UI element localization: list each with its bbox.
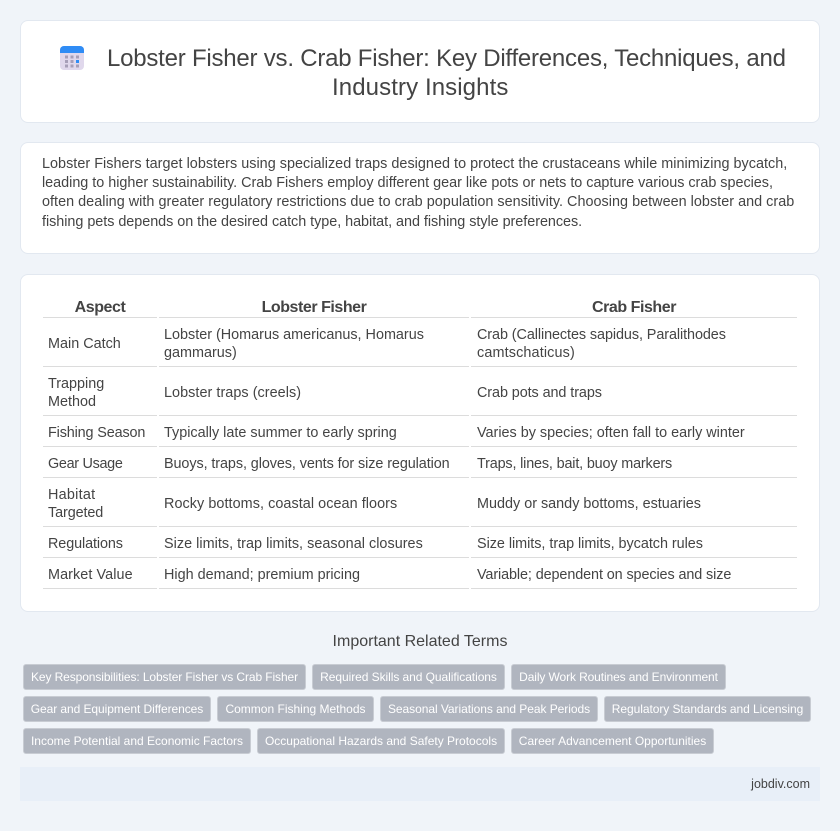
related terms tags: Daily Work Routines and Environment (519, 670, 718, 684)
panel: introduction (20, 142, 820, 254)
footer (20, 767, 820, 801)
text block: introduction: leading to higher sustainability. Crab Fishers employ different gear like pots or nets to capture various crab species, (42, 175, 773, 191)
row: fishing season: Varies by species; often fall to early winter (477, 425, 745, 441)
row: fishing season: Fishing Season (48, 425, 145, 441)
icon: calendar (60, 46, 84, 70)
title: Lobster Fisher vs. Crab Fisher: Key Differences, Techniques, and (107, 44, 786, 72)
panel: header (20, 20, 820, 123)
row: habitat targeted: Targeted (48, 505, 103, 521)
row: habitat targeted (48, 487, 701, 521)
row: habitat targeted: Rocky bottoms, coastal ocean floors (164, 496, 397, 512)
row: regulations: Size limits, trap limits, bycatch rules (477, 536, 703, 552)
row: market value: Market Value (48, 567, 133, 583)
row: main catch: Main Catch (48, 336, 121, 352)
row: fishing season: Typically late summer to early spring (164, 425, 397, 441)
row: habitat targeted: Muddy or sandy bottoms, estuaries (477, 496, 701, 512)
related terms tags: Required Skills and Qualifications (320, 670, 497, 684)
text block: introduction: Lobster Fishers target lobsters using specialized traps designed to protect the crustaceans while minimizing bycatch, (42, 156, 787, 172)
related terms tags (23, 664, 811, 754)
related terms tags: Income Potential and Economic Factors (31, 734, 243, 748)
related terms tags: Seasonal Variations and Peak Periods (388, 702, 590, 716)
row: main catch: gammarus) (164, 345, 237, 361)
row: market value: Variable; dependent on species and size (477, 567, 731, 583)
row: trapping method: Method (48, 394, 96, 410)
table header: Lobster Fisher (262, 299, 366, 316)
related terms tags: Occupational Hazards and Safety Protocols (265, 734, 497, 748)
row: market value: High demand; premium pricing (164, 567, 360, 583)
row: fishing season (48, 425, 745, 441)
title (107, 44, 786, 101)
row: regulations: Size limits, trap limits, seasonal closures (164, 536, 423, 552)
row: trapping method: Trapping (48, 376, 104, 392)
text block: introduction (42, 156, 794, 230)
row: gear usage: Traps, lines, bait, buoy markers (477, 456, 672, 472)
related terms tags: Common Fishing Methods (225, 702, 366, 716)
related terms tags: Regulatory Standards and Licensing (612, 702, 803, 716)
row: trapping method: Crab pots and traps (477, 385, 602, 401)
row: gear usage: Gear Usage (48, 456, 123, 472)
row: regulations: Regulations (48, 536, 123, 552)
table header (75, 299, 676, 316)
row: regulations (48, 536, 703, 552)
row: trapping method (48, 376, 602, 410)
row: main catch: camtschaticus) (477, 345, 575, 361)
footer source text: jobdiv.com (751, 777, 810, 791)
row: market value (48, 567, 731, 583)
related terms tags: Gear and Equipment Differences (31, 702, 203, 716)
row: main catch (48, 327, 726, 361)
text block: introduction: often dealing with greater regulatory restrictions due to crab population sensitivity. Choosing between lobster and crab (42, 194, 794, 210)
related terms tags: Career Advancement Opportunities (519, 734, 706, 748)
text block: introduction: fishing pets depends on the desired catch type, habitat, and fishing style preferences. (42, 214, 582, 230)
title: Industry Insights (332, 74, 508, 101)
related terms tags: Key Responsibilities: Lobster Fisher vs Crab Fisher (31, 670, 298, 684)
row: habitat targeted: Habitat (48, 487, 95, 503)
table header: Crab Fisher (592, 299, 676, 316)
row: gear usage (48, 456, 672, 472)
row: trapping method: Lobster traps (creels) (164, 385, 301, 401)
heading: important related terms: Important Related Terms (333, 633, 507, 650)
row: gear usage: Buoys, traps, gloves, vents for size regulation (164, 456, 450, 472)
panel: comparison table (20, 274, 820, 612)
table header: Aspect (75, 299, 125, 316)
row: main catch: Crab (Callinectes sapidus, Paralithodes (477, 327, 726, 343)
row: main catch: Lobster (Homarus americanus, Homarus (164, 327, 424, 343)
